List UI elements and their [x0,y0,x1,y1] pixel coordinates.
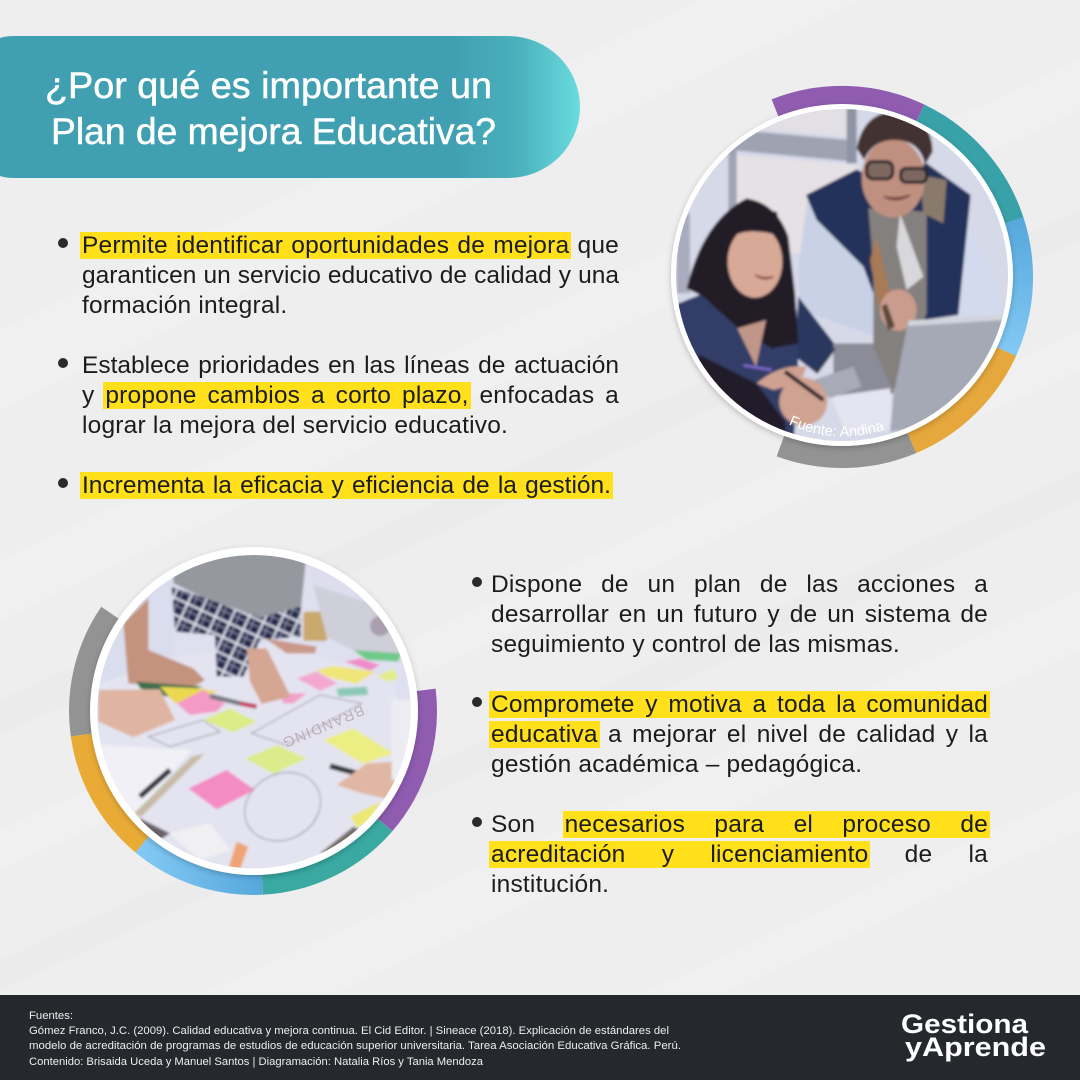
bullet: oportunidades de mejora: Permite identificar oportunidades de mejora que [82,232,619,259]
bullet: prioridades y cambios: Establece prioridades en las líneas de actuación [82,352,619,379]
bullet: acreditación y licenciamiento: acreditación y licenciamiento de la [491,841,988,868]
sources and credits [29,1010,681,1068]
bullet: oportunidades de mejora: garanticen un servicio educativo de calidad y una [82,262,619,289]
bullet: prioridades y cambios: lograr la mejora del servicio educativo. [82,412,508,439]
bullet: plan de acciones [472,571,988,658]
bullet: prioridades y cambios: y propone cambios a corto plazo, enfocadas a [82,382,619,409]
bullet: eficacia y eficiencia: Incrementa la eficacia y eficiencia de la gestión. [82,472,611,499]
footer bar [0,995,1080,1080]
title text: Plan de mejora Educativa? [51,111,496,152]
seated woman [678,292,800,434]
photo circle: planning table with sticky notes and coloured ring [69,546,437,895]
logo: yAprende [905,1032,1046,1062]
photo: two women at laptop [676,109,1008,441]
photo credit [788,424,897,436]
title text [45,65,496,152]
coloured ring segments [776,97,1022,457]
title text: ¿Por qué es importante un [45,65,492,106]
laptop and papers [830,388,893,433]
bullet: compromete y motiva: gestión académica – pedagógica. [491,751,862,778]
photo: two women at laptop: Fuente: Andina [790,416,884,436]
bullet: acreditación y licenciamiento [472,811,990,898]
bullet: oportunidades de mejora [58,232,619,319]
photo: hands over sticky notes [93,550,417,873]
logo [901,1009,1046,1062]
bullet: oportunidades de mejora: formación integral. [82,292,287,319]
bullet: acreditación y licenciamiento: institución. [491,871,609,898]
standing woman [799,200,874,334]
photo circle: teachers at laptop with coloured ring [668,86,1034,468]
bullet: plan de acciones: seguimiento y control de las mismas. [491,631,900,658]
sources and credits: Fuentes: [29,1010,73,1022]
bullet: compromete y motiva [472,691,990,778]
title banner [0,36,580,178]
sketched word on table: BRANDING [279,701,366,750]
bullet: plan de acciones: desarrollar en un futuro y de un sistema de [491,601,988,628]
coloured ring segments [80,613,426,884]
bullet: compromete y motiva: educativa a mejorar el nivel de calidad y la [491,721,988,748]
sources and credits: modelo de acreditación de programas de estudios de educación superior universitaria. Tarea Asociación Educativa Gráfica. Perú. [29,1040,681,1052]
sources and credits: Gómez Franco, J.C. (2009). Calidad educativa y mejora continua. El Cid Editor. | Sineace (2018). Explicación de estándares del [29,1025,669,1037]
logo: Gestiona [901,1009,1029,1039]
bullet: prioridades y cambios [58,352,619,439]
bullet: acreditación y licenciamiento: Son necesarios para el proceso de [491,811,988,838]
bullet: compromete y motiva: Compromete y motiva a toda la comunidad [491,691,988,718]
sources and credits: Contenido: Brisaida Uceda y Manuel Santos | Diagramación: Natalia Ríos y Tania Mendoza [29,1056,484,1068]
bullet: plan de acciones: Dispone de un plan de las acciones a [491,571,988,598]
